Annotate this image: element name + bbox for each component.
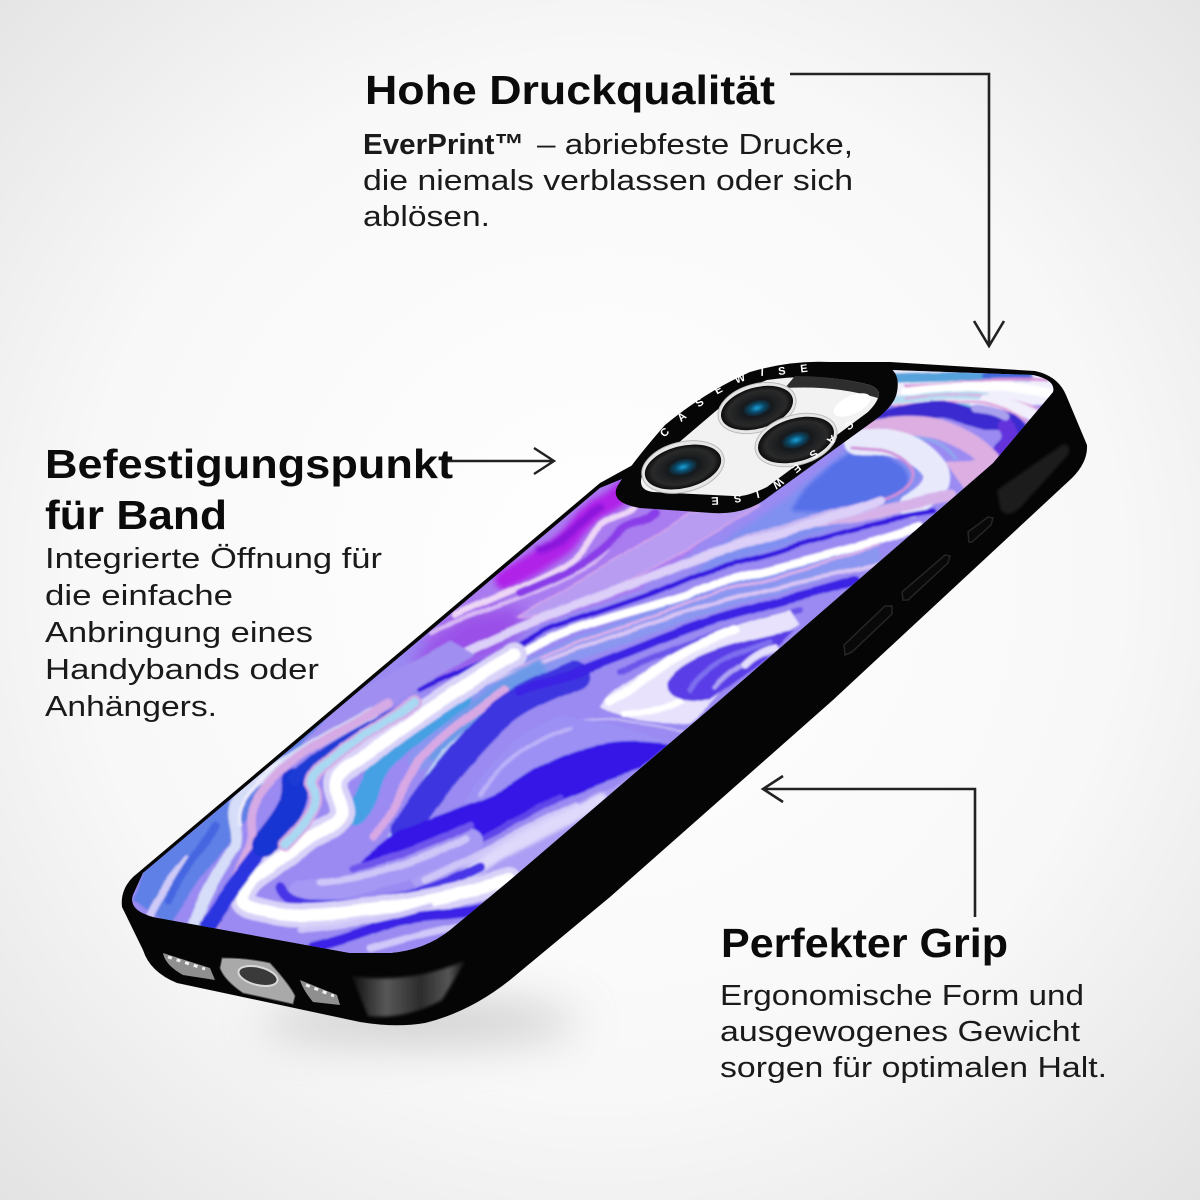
heading: Befestigungspunkt	[45, 441, 453, 487]
camera bump	[616, 362, 898, 514]
callout: print quality	[363, 67, 853, 233]
glossy bottom corner	[352, 960, 466, 1017]
top right bands	[890, 370, 1054, 407]
body text: Handybands oder	[45, 654, 319, 686]
CASEWISE bottom: CASEWISE	[712, 422, 854, 505]
side button: volume up	[902, 555, 950, 600]
stripes running across centre	[463, 494, 886, 655]
left blue field	[132, 718, 326, 920]
right speaker	[300, 980, 340, 1005]
upper right blue wash	[690, 445, 925, 575]
side button: volume down	[844, 606, 892, 655]
body text: sorgen für optimalen Halt.	[720, 1052, 1107, 1084]
heading: für Band	[45, 492, 227, 538]
body text: Anhängers.	[45, 691, 217, 723]
lens top	[712, 374, 802, 442]
brand path top	[664, 368, 840, 438]
body text	[363, 129, 853, 233]
white lens curve	[857, 442, 936, 506]
body text: ausgewogenes Gewicht	[720, 1016, 1080, 1048]
brand path bottom	[676, 420, 850, 498]
side button: mute switch	[968, 517, 993, 542]
camera window	[641, 377, 879, 496]
camera ring	[616, 362, 898, 513]
body text	[720, 980, 1107, 1084]
phone drop shadow	[260, 998, 580, 1046]
deep blue blade	[360, 741, 670, 863]
body text: – abriebfeste Drucke,	[537, 129, 853, 161]
pink glitter curve	[945, 459, 986, 489]
arrow: attachment point	[447, 448, 554, 474]
callout: attachment point	[45, 441, 453, 723]
side grip recess	[997, 444, 1069, 514]
body text	[45, 543, 382, 723]
heading: Perfekter Grip	[721, 920, 1008, 966]
purple below lens	[584, 717, 684, 734]
concentric field under blade	[411, 780, 627, 908]
case body	[122, 362, 1087, 1025]
body text: ablösen.	[363, 201, 490, 233]
inner shadow top	[785, 376, 879, 398]
charging port hole	[236, 962, 280, 990]
lower pink glitter	[820, 495, 950, 520]
body text: die niemals verblassen oder sich	[363, 165, 853, 197]
charging port	[220, 958, 295, 1004]
CASEWISE top: CASEWISE	[660, 364, 808, 436]
inner light lens	[559, 718, 587, 724]
body text: Integrierte Öffnung für	[45, 543, 382, 575]
light blue and pink waves	[355, 698, 460, 815]
marble print	[132, 370, 1054, 953]
body text: die einfache	[45, 580, 233, 612]
left speaker	[163, 953, 215, 980]
speaker holes right	[306, 985, 334, 996]
lens highlight	[830, 388, 874, 422]
main white swirl	[242, 655, 515, 916]
light blue ribbon	[285, 702, 415, 845]
arrow: print quality	[790, 74, 1004, 346]
body text: Ergonomische Form und	[720, 980, 1084, 1012]
blue oval in lens	[667, 630, 795, 701]
body text: EverPrint™	[363, 129, 524, 161]
lens right	[749, 404, 843, 476]
heading: Hohe Druckqualität	[365, 67, 775, 113]
lower blue band	[313, 906, 490, 947]
arrow: grip	[763, 776, 975, 917]
central white lens	[600, 610, 800, 723]
callout: grip	[720, 920, 1107, 1084]
lens left	[636, 433, 730, 501]
big blue band	[405, 675, 575, 830]
phone case with marble print	[122, 362, 1088, 1026]
heading	[45, 441, 453, 538]
dark blue blob	[885, 410, 1018, 450]
dark blue wave	[207, 838, 270, 925]
speaker holes left	[168, 957, 205, 969]
body text: Anbringung eines	[45, 617, 313, 649]
